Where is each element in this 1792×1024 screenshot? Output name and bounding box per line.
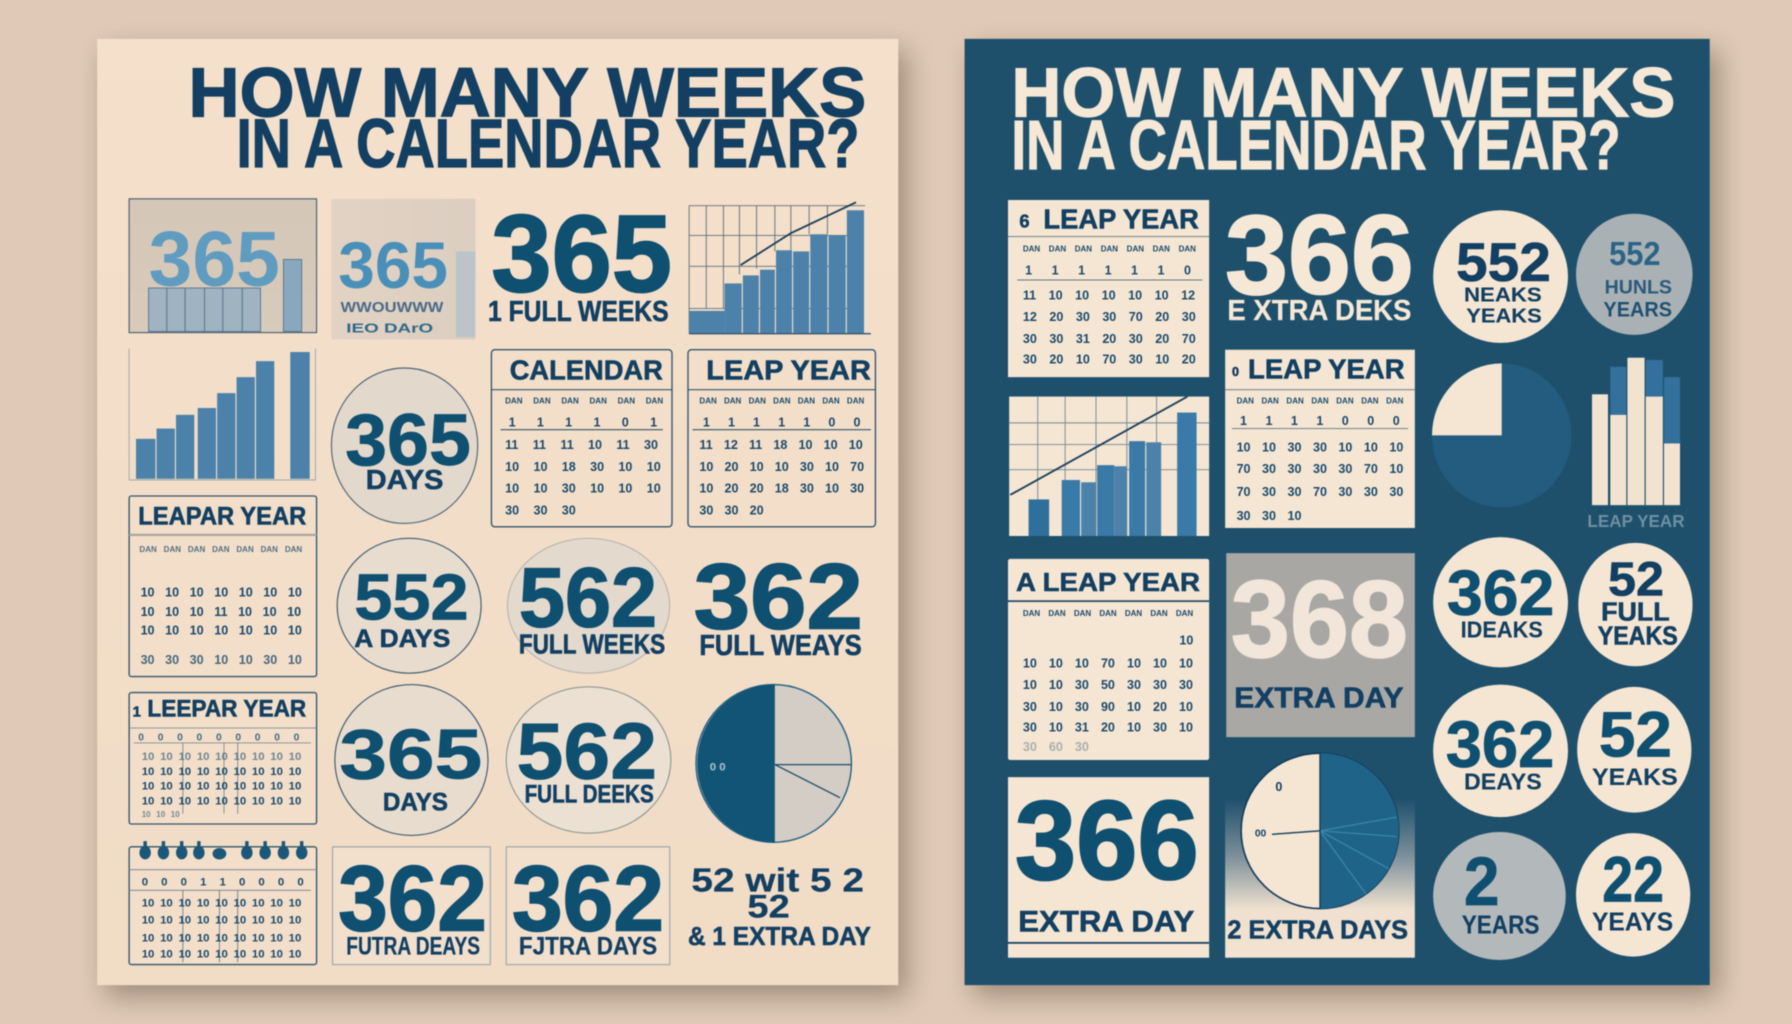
calendar: leap year: LEAP YEAR [706,354,871,385]
stat: 365 full weeks: 365 [491,193,672,315]
calendar: leap year middle: 1 1 1 1 0 0 0 [1240,414,1400,428]
tile: 366 extra day [1008,777,1209,958]
left title [189,54,866,182]
calendar: leapar year [129,496,317,677]
calendar: leap year top: 30 30 31 20 30 20 70 [1023,332,1196,346]
text: 52 with extra day: & 1 EXTRA DAY [688,921,871,951]
calendar: calendar: 10 10 30 10 10 10 [505,482,661,496]
stat: 362 full weays: 362 [694,545,863,649]
circle: 552 neaks yeaks: NEAKS [1464,284,1542,307]
calendar: leapar year: 10 10 10 10 10 10 10 [141,623,302,637]
circle: 552 gray [1576,214,1693,335]
left title: IN A CALENDAR YEAR? [237,105,859,182]
calendar: leap year top: 6 [1019,210,1030,231]
circle: 2 years gray [1433,832,1566,960]
calendar: calendar: 10 10 18 30 10 10 [505,460,661,474]
calendar: calendar: 30 30 30 [505,503,576,517]
circle: 365 days lower: DAYS [383,788,448,816]
calendar: a leap year: DAN DAN DAN DAN DAN DAN DAN [1023,609,1193,618]
pie chart: left: 0 0 [710,761,726,773]
circle: 22 yeays [1576,833,1690,957]
calendar: a leap year: 10 [1179,634,1193,648]
pie chart: right top [1432,363,1571,507]
calendar: a leap year: A LEAP YEAR [1016,567,1200,597]
tile: 366 extra day: 366 [1015,778,1199,903]
calendar: leap year [688,350,875,527]
calendar: leap year: 1 1 1 1 1 0 0 [703,415,860,429]
circle: 52 full yeaks [1578,543,1693,666]
calendar: a leap year: 30 60 30 [1023,740,1089,754]
calendar: ringed: 10 10 10 10 10 10 10 10 10 [142,949,301,961]
circle: 562 full weeks [507,538,670,673]
calendar: leepar year: LEEPAR YEAR [147,696,306,723]
circle: 22 yeays: YEAYS [1592,906,1673,936]
pie chart: right bottom: 00 [1255,829,1267,840]
circle: 562 full deeks: 562 [517,706,657,795]
circle: 22 yeays: 22 [1602,844,1664,916]
circle: 552 days: A DAYS [354,625,450,653]
circle: 552 neaks yeaks: YEAKS [1466,304,1542,327]
calendar: calendar: 1 1 1 1 0 1 [509,415,657,429]
circle: 365 days: 365 [345,400,471,481]
circle: 2 years gray: YEARS [1462,910,1539,940]
circle: 365 days lower: 365 [339,715,482,794]
calendar: leap year top: 12 20 30 30 70 20 30 [1023,310,1196,324]
calendar: leepar year: 0 0 0 0 0 0 0 0 0 [138,733,300,744]
circle: 2 years gray: 2 [1464,843,1499,920]
circle: 362 deays [1433,685,1568,817]
left title: HOW MANY WEEKS [189,54,866,132]
tile: faded 365 with bars [129,199,317,333]
calendar: leap year middle: 70 30 30 70 30 30 30 [1237,485,1403,499]
tile: faded 365 caption card: 365 [338,229,448,303]
tile: 362 futra deays: FUTRA DEAYS [346,932,480,960]
right title [1011,54,1675,184]
calendar: a leap year [1008,559,1209,760]
calendar: a leap year: 10 10 10 70 10 10 10 [1023,656,1193,670]
text: 52 with extra day: 52 wit 5 2 [691,862,864,899]
calendar: leapar year: 10 10 10 10 10 10 10 [141,586,302,600]
calendar: leap year top: 30 20 10 70 30 10 20 [1023,352,1196,366]
tile: 368 extra day: 368 [1231,559,1408,681]
circle: 362 deays: DEAYS [1464,769,1542,795]
pie chart: right bottom: 0 [1275,780,1282,794]
tile: 368 extra day [1226,553,1415,737]
calendar: leapar year: 30 30 30 10 10 30 10 [141,653,302,667]
circle: 552 gray: 552 [1609,236,1661,273]
circle: 362 deaks: 362 [1447,557,1554,629]
circle: 552 neaks yeaks [1433,210,1568,343]
calendar: leap year middle: 70 30 30 30 30 70 10 [1237,462,1403,476]
calendar: calendar: 11 11 11 10 11 30 [505,438,658,452]
circle: 562 full deeks: FULL DEEKS [525,780,654,808]
calendar: leapar year: 10 10 10 11 10 10 10 [141,605,301,619]
circle: 552 days [337,538,481,673]
calendar: leepar year: 10 10 10 10 10 10 10 10 10 [142,766,301,778]
tile: faded 365 caption card: IEO DArO [346,322,433,336]
circle: 552 neaks yeaks: 552 [1456,231,1551,293]
stat: 362 full weays: FULL WEAYS [699,630,862,662]
tile: 366 extra day: EXTRA DAY [1018,905,1194,938]
tile: pie with 2 extra days: 2 EXTRA DAYS [1227,914,1408,944]
circle: 52 yeaks [1577,687,1691,813]
calendar: leepar year [129,693,317,824]
circle: 52 full yeaks: 52 [1608,553,1664,606]
tile: faded 365 caption card: WWOUWWW [341,300,443,316]
calendar: leapar year: DAN DAN DAN DAN DAN DAN DAN [139,545,302,554]
calendar: leepar year: 10 10 10 10 10 10 10 10 10 [142,751,301,763]
calendar: leap year middle: 0 [1232,365,1239,379]
chart: grid bars on cream [1009,397,1209,536]
text: 52 with extra day: 52 [747,889,790,925]
chart: grid bar chart [689,202,871,334]
pie chart: right bottom [1241,753,1399,909]
calendar: leap year top: 11 10 10 10 10 10 12 [1023,288,1195,302]
calendar: leap year: DAN DAN DAN DAN DAN DAN DAN [699,396,864,405]
tile: faded 365 caption card [331,199,475,339]
calendar: ringed: 0 0 0 1 1 0 0 0 0 [142,877,304,889]
calendar: leap year: 10 20 20 18 30 10 30 [699,482,864,496]
tile: 362 futra deays: 362 [338,846,487,950]
icon: calendar rings [139,841,307,859]
tile: 362 fjtra days: 362 [512,846,664,950]
circle: 362 deays: 362 [1446,708,1554,782]
tile: pie with 2 extra days [1225,753,1415,958]
calendar: ringed: 10 10 10 10 10 10 10 10 10 [142,914,301,926]
calendar: leap year top [1008,200,1209,377]
circle: 365 days: DAYS [366,464,443,495]
panel: right navy poster [965,39,1710,985]
calendar: ringed [129,841,317,965]
calendar: leepar year: 1 [133,705,141,721]
calendar: leap year middle: 10 10 30 30 10 10 10 [1237,440,1403,454]
circle: 362 deaks: IDEAKS [1461,617,1543,643]
right title: IN A CALENDAR YEAR? [1011,106,1621,184]
calendar: leapar year: LEAPAR YEAR [138,503,306,531]
circle: 52 full yeaks: YEAKS [1598,621,1678,651]
circle: 365 days [331,368,478,523]
chart: rising bars [129,349,315,480]
calendar: ringed: 10 10 10 10 10 10 10 10 10 [142,933,301,945]
calendar: leap year top: LEAP YEAR [1043,204,1199,235]
circle: 562 full weeks: FULL WEEKS [519,629,665,660]
tile: 368 extra day: EXTRA DAY [1234,682,1403,714]
circle: 52 full yeaks: FULL [1601,597,1670,627]
calendar: leepar year: 10 10 10 [142,810,180,819]
circle: 562 full deeks [506,687,671,833]
tile: faded 365 with bars: 365 [149,217,280,303]
chart caption: LEAP YEAR [1587,511,1685,531]
calendar: leap year middle: DAN DAN DAN DAN DAN DAN DAN [1237,396,1404,405]
circle: 362 deaks [1433,537,1568,667]
chart: stacked bars [1587,358,1685,531]
stat: 366 extra deks: 366 [1225,193,1414,318]
calendar: a leap year: 10 10 30 50 30 30 30 [1023,678,1193,692]
calendar: calendar: CALENDAR [510,354,663,385]
panel: left cream poster [97,39,898,985]
calendar: ringed: 10 10 10 10 10 10 10 10 10 [142,897,301,909]
pie chart: left [696,685,851,842]
calendar: a leap year: 30 10 31 20 10 30 10 [1023,720,1193,734]
calendar: leap year top: DAN DAN DAN DAN DAN DAN DAN [1023,244,1196,253]
calendar: leap year middle [1225,350,1415,528]
circle: 52 yeaks: 52 [1599,699,1672,771]
calendar: leap year: 11 12 11 18 10 10 10 [699,438,863,452]
circle: 552 days: 552 [354,560,469,633]
circle: 552 gray: HUNLS [1605,277,1672,299]
calendar: leap year middle: 30 30 10 [1237,509,1301,523]
calendar: leap year: 10 20 10 10 30 10 70 [699,460,864,474]
calendar: leap year: 30 30 20 [699,503,764,517]
calendar: leepar year: 10 10 10 10 10 10 10 10 10 [142,796,301,808]
circle: 562 full weeks: 562 [519,549,657,644]
text: 52 with extra day [688,862,871,951]
calendar: calendar [491,350,672,527]
tile: 362 fjtra days: FJTRA DAYS [519,932,657,960]
calendar: leepar year: 10 10 10 10 10 10 10 10 10 [142,781,301,793]
calendar: calendar: DAN DAN DAN DAN DAN DAN [505,396,663,405]
calendar: leap year top: 1 1 1 1 1 1 0 [1025,263,1191,277]
calendar: a leap year: 30 10 30 90 10 20 10 [1023,700,1193,714]
stat: 365 full weeks: 1 FULL WEEKS [488,296,669,328]
circle: 552 gray: YEARS [1603,297,1672,322]
circle: 365 days lower [335,685,488,835]
calendar: leap year middle: LEAP YEAR [1248,353,1405,384]
circle: 52 yeaks: YEAKS [1592,764,1678,791]
right title: HOW MANY WEEKS [1011,54,1675,132]
stat: 366 extra deks: E XTRA DEKS [1227,295,1411,327]
